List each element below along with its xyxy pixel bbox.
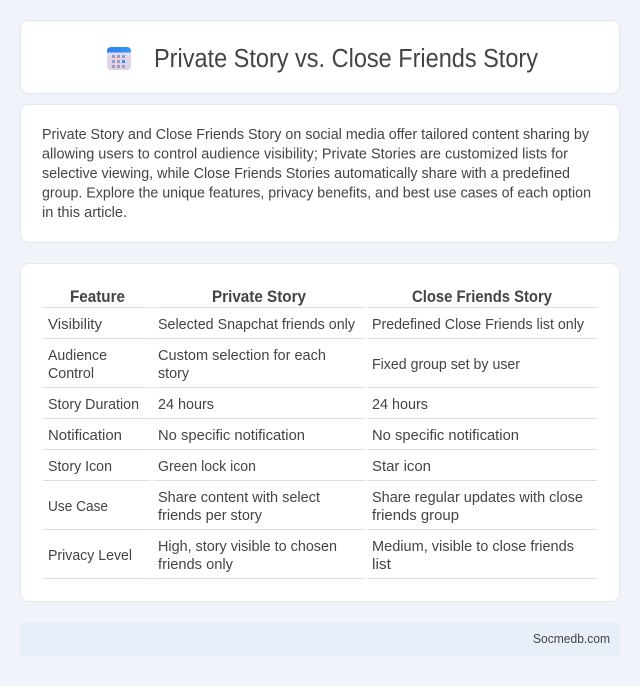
icon: calendar [107,47,131,70]
footer bar [20,622,620,656]
table row: audience control: Audience [48,348,107,364]
table row: use case: friends group [372,508,459,524]
table row: visibility [48,317,585,333]
table row: story icon: Star icon [372,459,431,475]
table row: audience control: story [158,366,190,382]
table row: story duration: 24 hours [158,397,214,413]
table row: notification: No specific notification [158,428,305,444]
table header: Feature [70,288,125,306]
table row: privacy level [48,539,574,573]
table row: privacy level: High, story visible to chosen [158,539,337,555]
table row: visibility: Selected Snapchat friends only [158,317,356,333]
table header: Close Friends Story [412,288,553,306]
table row: privacy level: list [372,557,391,573]
table row: privacy level: friends only [158,557,234,573]
text block: introduction paragraph [42,126,591,221]
table row: use case: Share content with select [158,490,320,506]
table row: audience control: Control [48,366,94,382]
table row: audience control: Custom selection for each [158,348,326,364]
text block: introduction paragraph: in this article. [42,204,127,221]
text block: introduction paragraph: group. Explore the unique features, privacy benefits, and best use cases of each option [42,184,591,202]
table row: story icon [48,459,431,475]
text block: introduction paragraph: Private Story and Close Friends Story on social media offer tailored content sharing by [42,126,589,143]
table row: audience control: Fixed group set by user [372,357,520,373]
panel: title card [20,20,620,94]
panel: comparison table [20,264,620,602]
footer credit: Socmedb.com [533,632,610,646]
table row: story duration: 24 hours [372,397,428,413]
table row: use case: friends per story [158,508,263,524]
table row: notification: No specific notification [372,428,519,444]
text block: introduction paragraph: allowing users to control audience visibility; Private Stories are customized lists for [42,146,568,162]
panel: introduction [20,104,620,242]
title: Private Story vs. Close Friends Story [154,45,538,73]
table row: story duration [48,397,428,413]
table header [70,288,553,306]
table row: notification: Notification [48,428,122,444]
text block: introduction paragraph: selective viewing, while Close Friends Stories automatically share with a predefined [42,165,570,182]
table row: audience control [48,348,520,382]
table row: story icon: Green lock icon [158,459,256,475]
table row: visibility: Predefined Close Friends list only [372,317,585,333]
table row: visibility: Visibility [48,317,103,333]
table row: use case: Use Case [48,499,108,515]
table row: use case [48,490,583,524]
table row: privacy level: Privacy Level [48,548,132,564]
table header: Private Story [212,288,307,306]
table row: story icon: Story Icon [48,459,112,475]
table row: story duration: Story Duration [48,397,139,413]
table row: use case: Share regular updates with close [372,490,583,506]
table row: privacy level: Medium, visible to close friends [372,539,574,555]
table row: notification [48,428,519,444]
